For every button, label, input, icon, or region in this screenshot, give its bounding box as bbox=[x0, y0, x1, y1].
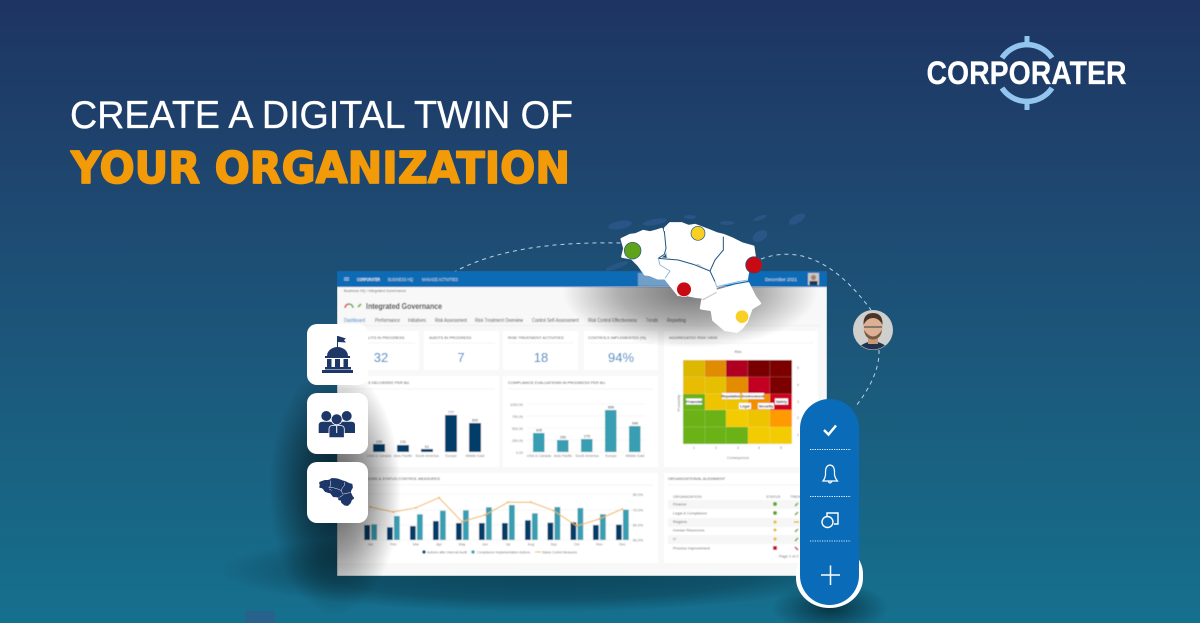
bar chart: compliance evaluations: 250 bbox=[560, 436, 566, 440]
panel: organizational alignment table: Finance bbox=[673, 502, 687, 506]
panel: organizational alignment table bbox=[668, 477, 800, 559]
headline: CREATE A DIGITAL TWIN OF bbox=[70, 94, 573, 137]
panel: organizational alignment table: ORGANIZATIONAL ALIGNMENT bbox=[668, 476, 726, 481]
icon: plus bbox=[821, 566, 840, 585]
bar chart: delivered per BU: 777 bbox=[448, 410, 454, 414]
breadcrumb: Business HQ / Integrated Governance bbox=[344, 289, 406, 293]
dashboard top bar: BUSINESS HQ bbox=[388, 277, 413, 282]
combo chart: status control measures: Jul bbox=[506, 542, 510, 546]
panel: aggregated risk view heat map: Financial bbox=[686, 400, 702, 404]
panel: aggregated risk view heat map: Safety bbox=[776, 400, 788, 404]
dashboard top bar bbox=[337, 271, 827, 287]
bar chart: compliance evaluations: 0.00 bbox=[516, 451, 523, 455]
KPI cards: 94% bbox=[608, 350, 634, 365]
panel: aggregated risk view heat map: 3 bbox=[797, 400, 799, 404]
bar chart: compliance evaluations: 275 bbox=[584, 434, 590, 438]
dashboard tabs: Risk Assessment bbox=[435, 318, 468, 324]
bar chart: compliance evaluations: 405 bbox=[536, 428, 542, 432]
combo chart: status control measures: Oct bbox=[574, 542, 579, 546]
dashboard tabs: Risk Treatment Overview bbox=[475, 318, 523, 324]
combo chart: status control measures: Actions after Internal Audit bbox=[427, 550, 467, 554]
KPI cards: RISK TREATMENT ACTIVITIES bbox=[508, 335, 564, 340]
panel: organizational alignment table: IT bbox=[673, 538, 677, 542]
bar chart: delivered per BU: South America bbox=[415, 454, 439, 458]
combo chart: status control measures: 50.0% bbox=[633, 538, 644, 542]
combo chart: status control measures bbox=[364, 477, 644, 554]
icon card: regional map bbox=[307, 462, 368, 523]
panel: aggregated risk view heat map: AGGREGATED RISK VIEW bbox=[669, 335, 718, 340]
bar chart: compliance evaluations: 250.00 bbox=[512, 439, 523, 443]
combo chart: status control measures: IONS & STATUS CONTROL MEASURES bbox=[368, 476, 440, 481]
panel: organizational alignment table: STATUS bbox=[766, 495, 781, 499]
combo chart: status control measures: Apr bbox=[436, 542, 443, 546]
bar chart: compliance evaluations: 750.00 bbox=[512, 415, 523, 419]
KPI cards: LITS IN PROGRESS bbox=[368, 335, 405, 340]
panel: aggregated risk view heat map: Environment bbox=[742, 394, 765, 398]
icon: check bbox=[824, 426, 836, 434]
bar chart: delivered per BU: 155 bbox=[376, 440, 382, 444]
panel: aggregated risk view heat map: Risk bbox=[734, 350, 742, 354]
bar chart: delivered per BU: 131 bbox=[400, 440, 406, 444]
dashboard top bar: CORPORATER bbox=[357, 277, 381, 282]
icon card: people bbox=[307, 393, 368, 454]
action pill bbox=[796, 399, 863, 608]
region borders bbox=[658, 231, 748, 300]
combo chart: status control measures: Jun bbox=[482, 542, 488, 546]
bar chart: delivered per BU: Europe bbox=[445, 454, 457, 458]
panel: aggregated risk view heat map bbox=[668, 336, 800, 460]
shadow below dashboard bbox=[220, 528, 860, 612]
combo chart: status control measures: Compliance Implementation Actions bbox=[477, 550, 530, 554]
dashboard title: Integrated Governance bbox=[366, 302, 442, 311]
icon: shapes bbox=[822, 513, 838, 528]
combo chart: status control measures: Dec bbox=[619, 542, 626, 546]
logo: Corporater: CORPORATER bbox=[926, 55, 1126, 91]
dashboard top bar: December 2021 bbox=[765, 277, 798, 282]
panel: organizational alignment table: Regions bbox=[673, 520, 687, 524]
bar chart: delivered per BU: USA & Canada bbox=[367, 454, 391, 458]
dashboard tabs: Performance bbox=[375, 318, 400, 324]
bar chart: delivered per BU: 600 bbox=[472, 418, 478, 422]
combo chart: status control measures: Sep bbox=[550, 542, 557, 546]
KPI cards: AUDITS IN PROGRESS bbox=[429, 335, 472, 340]
panel: aggregated risk view heat map: Legal bbox=[740, 404, 750, 408]
panel: organizational alignment table: TREND bbox=[790, 495, 803, 499]
bar chart: delivered per BU bbox=[367, 381, 484, 458]
panel: organizational alignment table: Process Improvement bbox=[673, 546, 711, 550]
icon card: government building bbox=[307, 324, 368, 385]
dashboard tabs: Trends bbox=[646, 318, 658, 324]
headline bbox=[70, 94, 573, 194]
bar chart: delivered per BU: Middle East bbox=[466, 454, 484, 458]
panel: aggregated risk view heat map: 5 bbox=[780, 446, 782, 450]
bar chart: compliance evaluations: 856 bbox=[608, 406, 614, 410]
panel: organizational alignment table: Page 1 of 2 bbox=[779, 554, 798, 558]
shadow under action pill bbox=[772, 582, 888, 623]
bar chart: compliance evaluations: COMPLIANCE EVALUATIONS IN PROGRESS PER BU bbox=[508, 380, 605, 385]
panel: organizational alignment table: ORGANIZATION bbox=[673, 495, 702, 499]
icon: bell bbox=[823, 465, 838, 483]
panel: aggregated risk view heat map: 3 bbox=[737, 446, 739, 450]
dashboard tabs: Initiatives bbox=[408, 318, 426, 324]
dashboard tabs: Reporting bbox=[667, 318, 686, 324]
logo: Corporater bbox=[926, 36, 1126, 110]
combo chart: status control measures: Feb bbox=[390, 542, 396, 546]
KPI cards: 32 bbox=[374, 350, 388, 365]
headline: YOUR ORGANIZATION bbox=[70, 143, 570, 194]
map regions bbox=[622, 223, 760, 332]
avatar: man with glasses bbox=[853, 310, 893, 352]
bar chart: delivered per BU: S DELIVERED PER BU bbox=[368, 380, 409, 385]
shadow behind side icon cards bbox=[269, 365, 401, 615]
combo chart: status control measures: Aug bbox=[528, 542, 534, 546]
panel: aggregated risk view heat map: 5 bbox=[797, 366, 799, 370]
combo chart: status control measures: Status Control Measures bbox=[542, 550, 577, 554]
bar chart: compliance evaluations: 546 bbox=[632, 422, 638, 426]
panel: organizational alignment table: Legal & Compliance bbox=[673, 512, 707, 516]
dashboard tabs: Risk Control Effectiveness bbox=[588, 318, 637, 324]
bar chart: compliance evaluations: 1000.00 bbox=[510, 403, 523, 407]
map of regions with status markers bbox=[622, 223, 762, 332]
panel: aggregated risk view heat map: 2 bbox=[715, 446, 717, 450]
bar chart: compliance evaluations: Europe bbox=[605, 454, 617, 458]
combo chart: status control measures: Nov bbox=[596, 542, 603, 546]
KPI cards bbox=[368, 336, 646, 362]
dashboard page background bbox=[337, 271, 827, 576]
panel: aggregated risk view heat map: Security bbox=[759, 404, 774, 408]
KPI cards: CONTROLS IMPLEMENTED (%) bbox=[588, 335, 647, 340]
combo chart: status control measures: 60.0% bbox=[633, 524, 644, 528]
bar chart: compliance evaluations: 500.00 bbox=[512, 427, 523, 431]
dashboard tabs: Control Self-Assessment bbox=[532, 318, 580, 324]
dashboard tabs: Dashboard bbox=[344, 318, 365, 324]
combo chart: status control measures: 70.0% bbox=[633, 508, 644, 512]
dashboard top bar: MANAGE ACTIVITIES bbox=[422, 277, 458, 282]
bar chart: delivered per BU: 61 bbox=[425, 445, 429, 449]
bar chart: compliance evaluations bbox=[508, 381, 644, 458]
KPI cards: 7 bbox=[457, 350, 465, 365]
decorative map brush strokes bbox=[605, 211, 807, 272]
dashed connector arcs bbox=[433, 243, 879, 406]
bar chart: compliance evaluations: Middle East bbox=[626, 454, 644, 458]
panel: organizational alignment table: Human Resources bbox=[673, 528, 705, 532]
combo chart: status control measures: Mar bbox=[413, 542, 420, 546]
dashboard tabs bbox=[344, 318, 686, 324]
panel: aggregated risk view heat map: 1 bbox=[693, 446, 695, 450]
panel: aggregated risk view heat map: Probability bbox=[677, 394, 681, 411]
status markers bbox=[624, 226, 762, 323]
shadow under map bbox=[568, 287, 812, 345]
panel: aggregated risk view heat map: 1 bbox=[797, 433, 799, 437]
panel: aggregated risk view heat map: 4 bbox=[758, 446, 760, 450]
bar chart: compliance evaluations: South America bbox=[575, 454, 599, 458]
combo chart: status control measures: 80.0% bbox=[633, 493, 644, 497]
panel: aggregated risk view heat map: 4 bbox=[797, 383, 799, 387]
combo chart: status control measures: Jan bbox=[367, 542, 373, 546]
panel: aggregated risk view heat map: Consequence bbox=[727, 456, 749, 460]
panel: aggregated risk view heat map: Reputation bbox=[721, 394, 741, 398]
bar chart: compliance evaluations: USA & Canada bbox=[527, 454, 551, 458]
KPI cards: 18 bbox=[534, 350, 548, 365]
decorative block at bottom edge bbox=[245, 611, 275, 623]
dashboard screenshot bbox=[337, 271, 827, 576]
bar chart: delivered per BU: Asia Pacific bbox=[394, 454, 412, 458]
panel: aggregated risk view heat map: 2 bbox=[797, 416, 799, 420]
combo chart: status control measures: May bbox=[459, 542, 466, 546]
bar chart: compliance evaluations: Asia Pacific bbox=[554, 454, 572, 458]
